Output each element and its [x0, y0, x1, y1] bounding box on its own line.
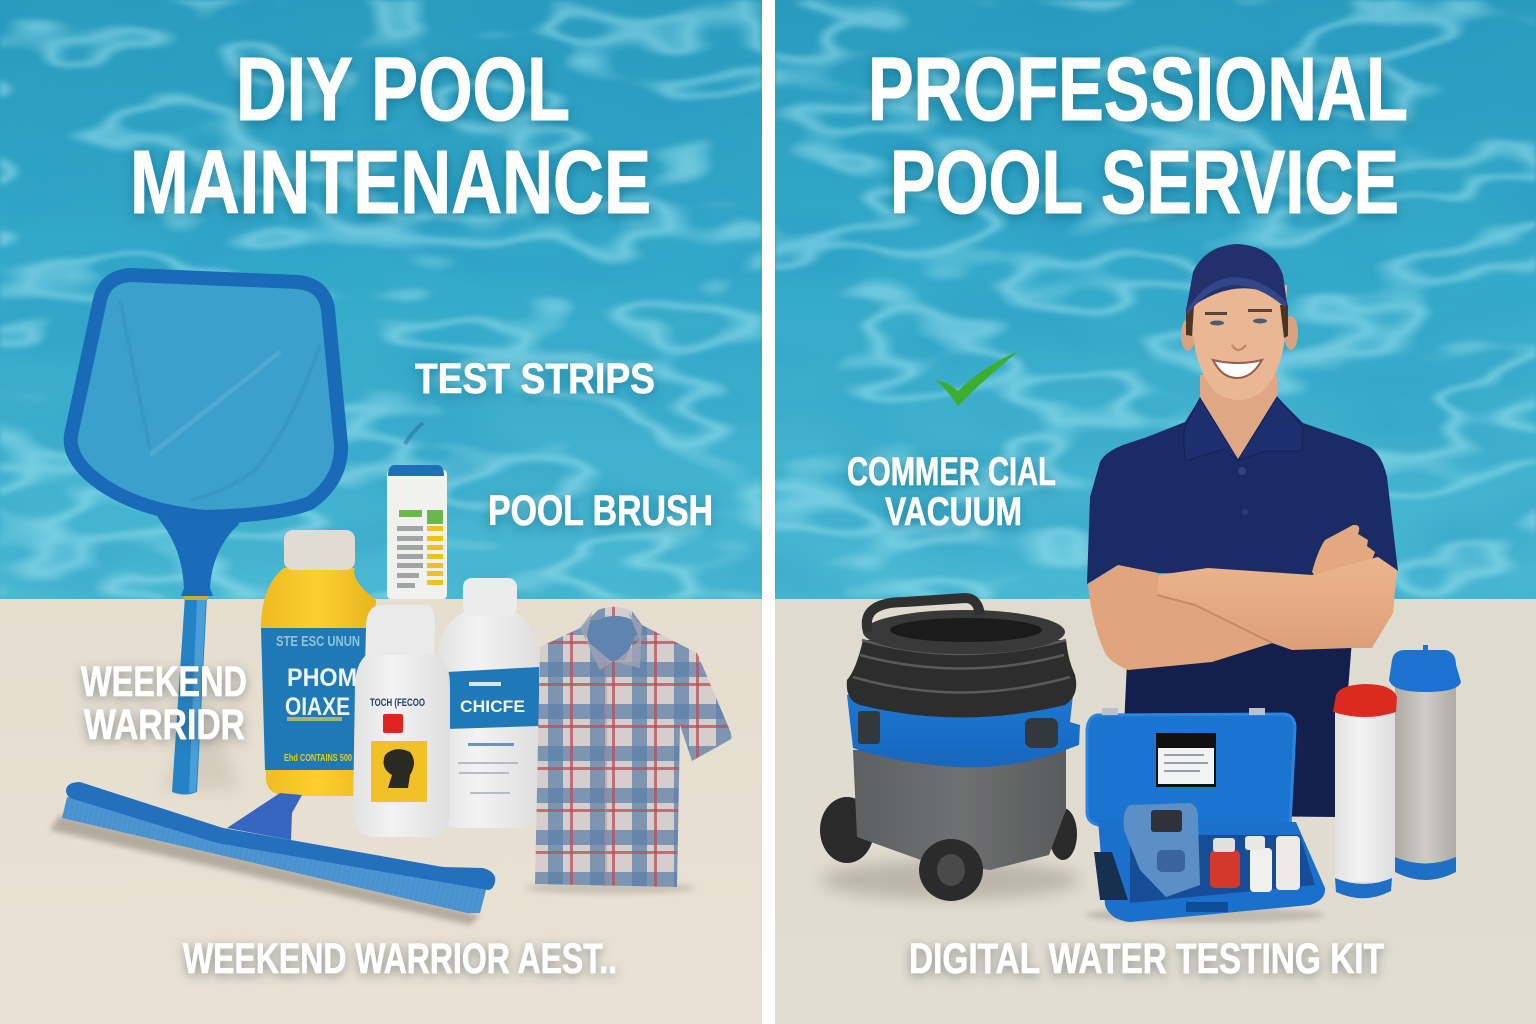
panel: professional pool service [775, 0, 1536, 1024]
eyes and brows [1205, 309, 1272, 315]
polo shirt [1087, 397, 1398, 584]
lid [1087, 714, 1295, 825]
icon: test strips tube [387, 465, 447, 599]
torso [1120, 640, 1352, 817]
icon: digital water testing kit [1085, 708, 1325, 923]
arms [1088, 525, 1397, 670]
tray [1098, 820, 1325, 922]
label: weekend warrior [81, 658, 247, 749]
panel: DIY pool maintenance [0, 0, 762, 1024]
label: weekend warrior: WEEKEND [81, 658, 247, 706]
illustration: pool technician [1087, 244, 1398, 817]
decorative streak above test strips [405, 423, 423, 444]
caption: digital water testing kit: DIGITAL WATER TESTING KIT [909, 935, 1384, 983]
water background right [775, 0, 1536, 599]
icon: yellow chemical bottle: STE ESC UNUN [276, 633, 360, 650]
icon: leaf skimmer net [71, 275, 341, 794]
icon: white bottle, front [353, 605, 450, 837]
icon: pool brush [50, 782, 495, 925]
ears [1181, 319, 1195, 351]
label: commercial vacuum: COMMER CIAL [847, 450, 1056, 494]
neck [1200, 375, 1278, 462]
icon: green check mark [935, 351, 1019, 406]
collar [1184, 398, 1238, 461]
label: pool brush: POOL BRUSH [488, 487, 713, 535]
nose and smile [1232, 345, 1246, 350]
digital meter [1124, 803, 1200, 897]
heading: DIY Pool Maintenance: MAINTENANCE [130, 133, 651, 233]
heading: DIY Pool Maintenance [130, 40, 651, 233]
icon: white bottle, front: TOCH (FECOO [370, 697, 425, 709]
rear wheels [820, 797, 874, 863]
heading: DIY Pool Maintenance: DIY POOL [236, 40, 570, 140]
pool deck right [775, 599, 1536, 1024]
icon: commercial vacuum [820, 598, 1080, 901]
front wheel [919, 839, 983, 901]
grey cylinder [1395, 685, 1456, 865]
icon: red-capped filter cylinder, grey filter cylinder [1333, 645, 1461, 898]
pool deck left [0, 599, 762, 1024]
face [1190, 285, 1287, 400]
label: commercial vacuum: VACUUM [885, 490, 1022, 534]
heading: Professional Pool Service [868, 40, 1408, 233]
label: weekend warrior: WARRIDR [84, 701, 245, 749]
water background left [0, 0, 762, 599]
icon: yellow chemical bottle: PHOM [287, 664, 357, 692]
reagent bottles [1210, 850, 1240, 888]
icon: yellow chemical bottle [261, 530, 376, 796]
caption: weekend warrior aesthetic: WEEKEND WARRIOR AEST.. [183, 935, 617, 983]
icon: plaid shirt [525, 607, 733, 894]
icon: white bottle, back right [437, 578, 539, 828]
hose coils [847, 640, 1076, 718]
label: commercial vacuum [847, 450, 1056, 534]
white cylinder [1335, 712, 1395, 882]
tank [853, 750, 1066, 870]
icon: white bottle, back right: CHICFE [460, 697, 525, 716]
label: test strips: TEST STRIPS [415, 355, 655, 403]
cap [1186, 244, 1287, 311]
icon: yellow chemical bottle: OIAXE [285, 693, 350, 721]
icon: yellow chemical bottle: Ehd CONTAINS 500 [284, 753, 352, 764]
blue band [847, 695, 1080, 767]
instruction card [1156, 733, 1216, 787]
